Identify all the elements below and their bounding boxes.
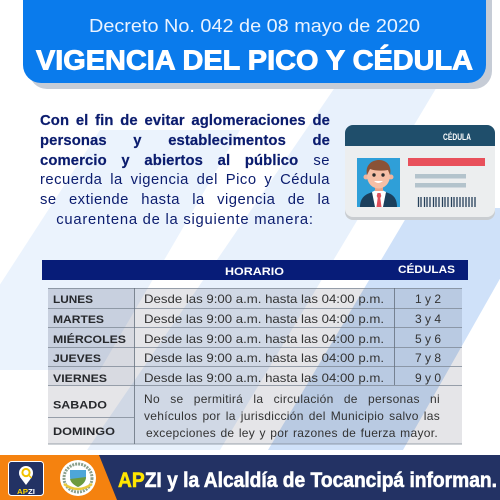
icon: portrait [357, 158, 400, 207]
ID card illustration [345, 125, 495, 220]
day labels: JUEVES [53, 353, 101, 365]
day labels: MARTES [53, 314, 104, 326]
schedule hours: Desde las 9:00 a.m. hasta las 04:00 p.m. [144, 371, 384, 385]
weekend notice: No se permitirá la circulación de personas ni [144, 392, 440, 406]
cedula digits: 7 y 8 [415, 351, 441, 365]
day labels: VIERNES [53, 373, 107, 385]
weekend notice [144, 392, 440, 440]
footer bar [0, 455, 500, 500]
main title: VIGENCIA DEL PICO Y CÉDULA [36, 44, 473, 76]
schedule hours: Desde las 9:00 a.m. hasta las 04:00 p.m. [144, 332, 384, 346]
intro paragraph: personas y establecimentos de [40, 133, 330, 149]
cedula digits: 5 y 6 [415, 332, 441, 346]
barcode [418, 197, 475, 207]
cedula digits [415, 292, 441, 385]
day labels: DOMINGO [53, 426, 116, 438]
day labels: LUNES [53, 294, 93, 306]
header banner [23, 0, 492, 89]
table header bar: HORARIO [225, 266, 284, 278]
intro paragraph: recuerda la vigencia del Pico y Cédula [40, 172, 330, 188]
intro paragraph: cuarentena de la siguiente manera: [56, 212, 314, 228]
cedula digits: 1 y 2 [415, 292, 441, 306]
schedule table [48, 288, 462, 444]
day labels: SABADO [53, 400, 107, 412]
weekend notice: vehículos por la jurisdicción del Municipio salvo las [144, 409, 440, 423]
schedule hours: Desde las 9:00 a.m. hasta las 04:00 p.m. [144, 292, 384, 306]
day labels [53, 294, 126, 438]
table header bar: CÉDULAS [398, 263, 455, 276]
icon: APZI logo: APZI [17, 487, 35, 496]
intro paragraph: Con el fin de evitar aglomeraciones de [40, 113, 330, 129]
decree subtitle: Decreto No. 042 de 08 mayo de 2020 [89, 15, 420, 36]
day labels: MIÉRCOLES [53, 333, 126, 346]
background diagonal bands [0, 70, 500, 450]
icon: municipal seal [60, 460, 96, 496]
ID card illustration: CÉDULA [443, 132, 471, 142]
icon: APZI logo [8, 462, 44, 496]
table header bar [42, 260, 468, 280]
intro paragraph: se extiende hasta la vigencia de la [40, 192, 330, 208]
schedule hours [144, 292, 384, 385]
cedula digits: 9 y 0 [415, 371, 441, 385]
cedula digits: 3 y 4 [415, 312, 441, 326]
schedule hours: Desde las 9:00 a.m. hasta las 04:00 p.m. [144, 351, 384, 365]
weekend notice: excepciones de ley y por razones de fuerza mayor. [146, 426, 438, 440]
intro paragraph: comercio y abiertos al público se [40, 153, 330, 169]
intro paragraph [40, 113, 330, 228]
schedule hours: Desde las 9:00 a.m. hasta las 04:00 p.m. [144, 312, 384, 326]
